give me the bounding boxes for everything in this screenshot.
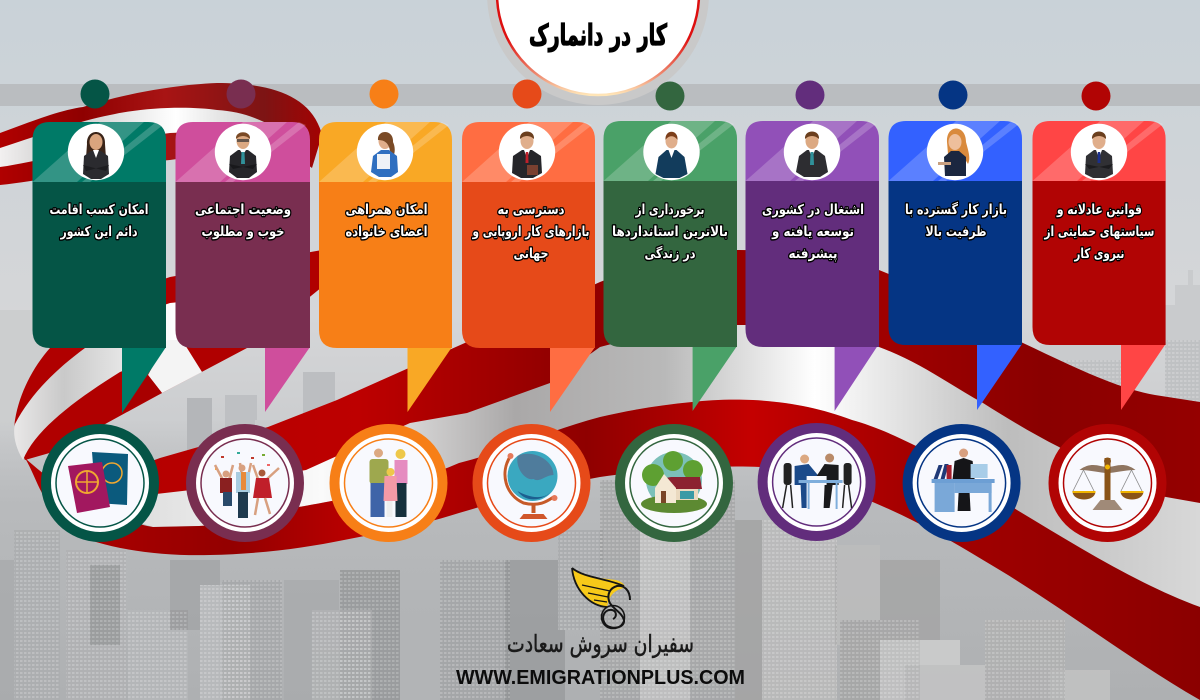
- logo mark: golden wing and swan: [572, 568, 630, 628]
- icon: business meeting: [758, 423, 876, 541]
- card 1 body: [32, 170, 166, 348]
- icon: office desk: [903, 424, 1021, 542]
- card 2 avatar: [215, 124, 271, 180]
- card 6 avatar: [784, 124, 840, 180]
- card 3 pointer: [408, 347, 452, 412]
- card 3 body: [319, 170, 452, 348]
- card 5 avatar: [643, 124, 700, 180]
- card 8 text: قوانین عادلانه و: [1056, 202, 1142, 218]
- card 8 text: سیاستهای حمایتی از: [1044, 224, 1154, 240]
- card 1: permanent residence: [32, 122, 166, 413]
- card 1 header: [32, 122, 166, 182]
- card 5 text: بالاترین استانداردها: [612, 224, 728, 240]
- card 4 body: [462, 170, 595, 348]
- card 5 text: در زندگی: [644, 245, 696, 262]
- icon: house and trees: [615, 424, 733, 542]
- card 8 body: [1032, 170, 1166, 345]
- card 8 pointer: [1121, 344, 1166, 410]
- card 4 avatar: [499, 124, 555, 180]
- card 4 header: [462, 122, 595, 182]
- card 4 text: جهانی: [514, 246, 548, 262]
- card 6 pointer: [835, 346, 878, 411]
- card 3 text: امکان همراهی: [346, 202, 428, 218]
- card 6 text: اشتغال در کشوری: [762, 202, 864, 218]
- card 5 pointer: [693, 346, 737, 411]
- card 8 avatar: [1071, 124, 1127, 180]
- ribbon: left loop: [15, 250, 322, 460]
- card 6 body: [746, 170, 879, 347]
- timeline dots: [80, 80, 1110, 110]
- icon: globe: [472, 424, 590, 542]
- card 2 text: خوب و مطلوب: [202, 224, 284, 240]
- card 8 text: [1044, 202, 1154, 262]
- card 4 text: [472, 202, 590, 262]
- card 1 text: [50, 202, 148, 240]
- card 6 text: پیشرفته: [788, 246, 838, 262]
- card 2: social status: [176, 122, 310, 412]
- card 5 text: برخورداری از: [635, 202, 704, 218]
- icon: scales of justice: [1048, 424, 1166, 542]
- card 7 text: ظرفیت بالا: [926, 224, 986, 240]
- ribbon: upper red band: [100, 250, 1200, 520]
- card 4 pointer: [550, 347, 595, 412]
- card 1 text: امکان کسب اقامت: [50, 202, 148, 218]
- card 7 avatar: [927, 124, 983, 180]
- card 7 body: [888, 170, 1022, 345]
- card 3 text: [346, 202, 428, 240]
- ribbon: lower red band: [25, 400, 1200, 700]
- icon: celebrating people: [186, 424, 304, 542]
- timeline bar: [0, 84, 1200, 106]
- card 2 pointer: [265, 347, 310, 412]
- card 2 text: [195, 202, 291, 240]
- card 1 text: دائم این کشور: [60, 224, 138, 240]
- card 2 body: [176, 170, 310, 348]
- card 1 pointer: [122, 347, 166, 413]
- card 8: fair labour laws: [1032, 121, 1166, 410]
- card 7 pointer: [977, 344, 1022, 410]
- card 3 text: اعضای خانواده: [346, 224, 428, 240]
- card 3: accompanying family: [319, 122, 452, 412]
- card 7 text: بازار کار گسترده با: [905, 201, 1007, 218]
- card 3 avatar: [357, 124, 413, 180]
- icon: passports: [41, 424, 159, 542]
- card 7 header: [888, 121, 1022, 181]
- title badge: [487, 0, 709, 105]
- card 8 header: [1032, 121, 1166, 181]
- card 6 text: توسعه یافته و: [771, 224, 854, 240]
- icon: family: [330, 424, 448, 542]
- website url: WWW.EMIGRATIONPLUS.COM: [456, 667, 745, 689]
- card 6 header: [746, 121, 879, 181]
- card 3 header: [319, 122, 452, 182]
- title: کار در دانمارک: [529, 18, 667, 52]
- card 2 text: وضعیت اجتماعی: [195, 202, 291, 218]
- card 5 header: [604, 121, 737, 181]
- card 2 header: [176, 122, 310, 182]
- card 5 body: [604, 170, 737, 347]
- card 6 text: [762, 202, 864, 262]
- ribbon: middle white band: [130, 325, 1200, 607]
- ribbon: top-left arc: [0, 83, 322, 185]
- card 5 text: [612, 202, 728, 262]
- card 7: wide job market: [888, 121, 1022, 410]
- card 4 text: بازارهای کار اروپایی و: [472, 224, 590, 240]
- card 7 text: [905, 201, 1007, 240]
- card 5: highest life standards: [604, 121, 737, 411]
- card 6: developed country: [746, 121, 879, 411]
- logo name: سفیران سروش سعادت: [507, 630, 694, 658]
- card 8 text: نیروی کار: [1074, 246, 1124, 262]
- card 4 text: دسترسی به: [498, 202, 565, 218]
- card 1 avatar: [68, 124, 124, 180]
- card 4: access to markets: [462, 122, 595, 412]
